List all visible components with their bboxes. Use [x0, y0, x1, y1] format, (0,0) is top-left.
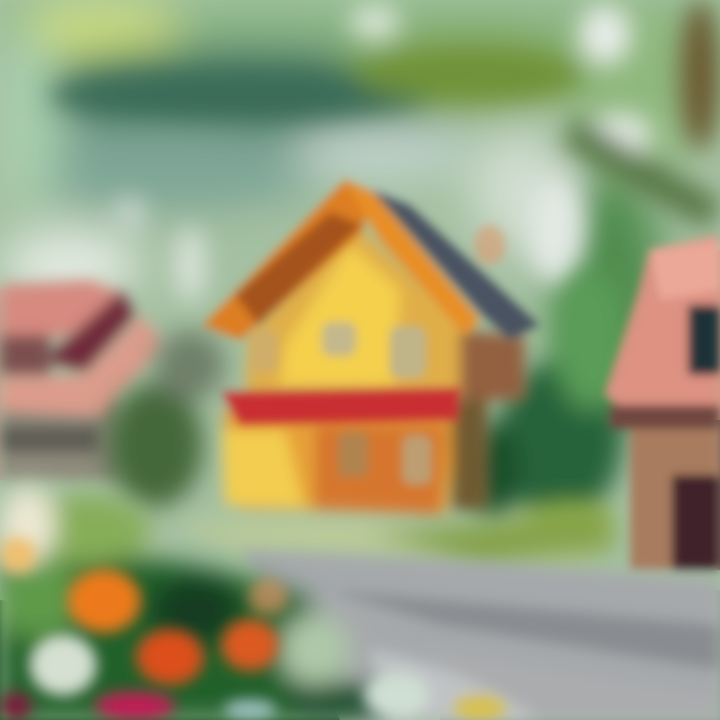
road and grass	[170, 510, 720, 720]
flower bush foreground	[0, 487, 506, 720]
left house	[0, 280, 165, 480]
right foliage	[469, 270, 625, 545]
right house	[605, 235, 720, 570]
central yellow house	[203, 180, 540, 515]
hedge between houses	[107, 330, 225, 507]
